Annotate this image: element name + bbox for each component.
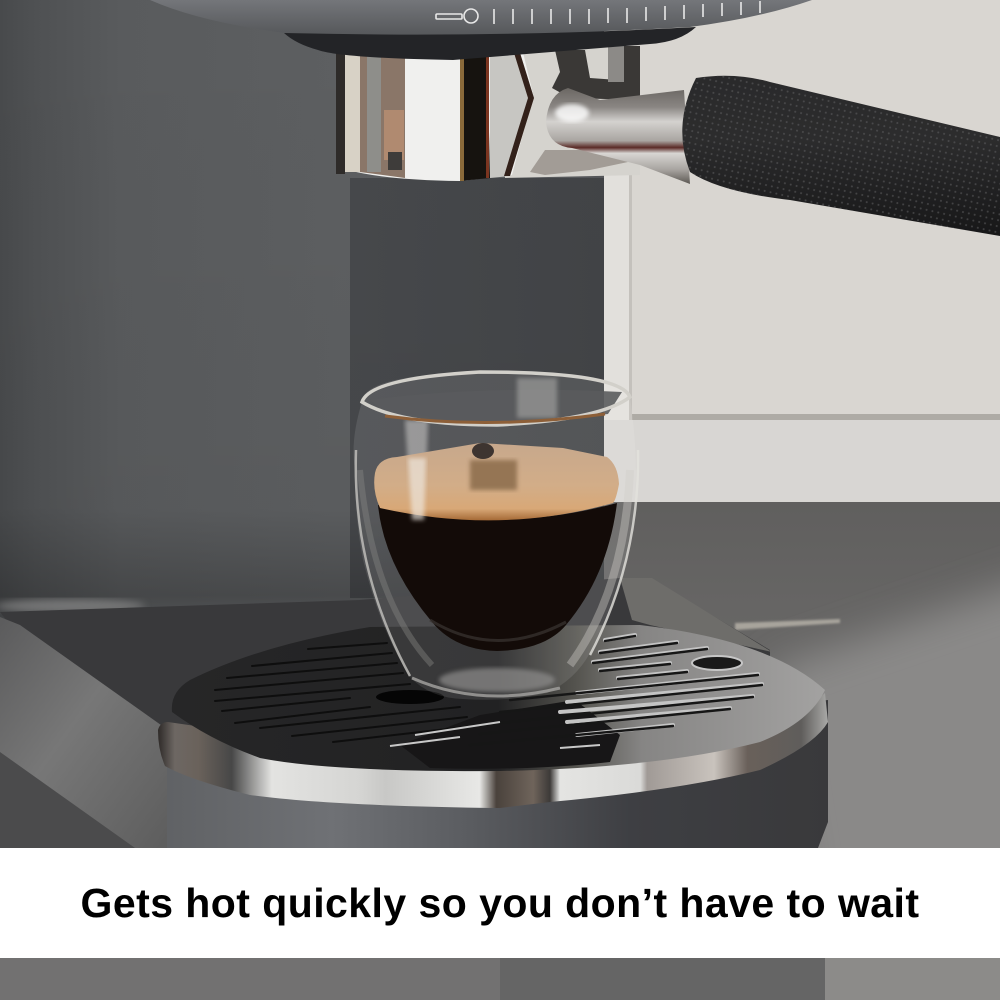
left slots bbox=[215, 643, 500, 742]
bottom strip: countertop reflection bbox=[0, 958, 1000, 1000]
gap behind portafilter bbox=[505, 40, 640, 178]
portafilter handle bbox=[682, 76, 1000, 236]
countertop bbox=[600, 502, 1000, 848]
glass body bbox=[354, 372, 636, 700]
glass highlights bbox=[356, 450, 410, 676]
tray base bbox=[167, 700, 828, 848]
drip tray bbox=[158, 625, 828, 848]
machine base bbox=[0, 578, 772, 848]
portafilter chrome basket bbox=[336, 40, 534, 181]
brew head housing bbox=[150, 0, 812, 60]
machine body bbox=[0, 0, 604, 620]
background wall bbox=[600, 0, 1000, 425]
top plate bbox=[172, 625, 825, 771]
portafilter stem bbox=[546, 88, 690, 184]
rim bbox=[362, 372, 630, 425]
crema bbox=[374, 443, 619, 520]
portafilter bracket and lower lug bbox=[530, 46, 640, 175]
scale markings bbox=[436, 1, 760, 24]
caption banner bbox=[0, 848, 1000, 958]
dark reflection on plate bbox=[400, 700, 620, 769]
caption banner: Gets hot quickly so you don’t have to wait bbox=[80, 880, 920, 926]
espresso liquid bbox=[378, 503, 617, 651]
chrome rim bbox=[158, 693, 828, 808]
skirting tile bbox=[604, 420, 1000, 502]
right slots bbox=[560, 635, 762, 735]
light streak on counter bbox=[735, 619, 840, 630]
bright slot reflections bbox=[390, 722, 600, 748]
stem highlight bbox=[555, 104, 589, 122]
glass cup with espresso bbox=[354, 372, 638, 700]
